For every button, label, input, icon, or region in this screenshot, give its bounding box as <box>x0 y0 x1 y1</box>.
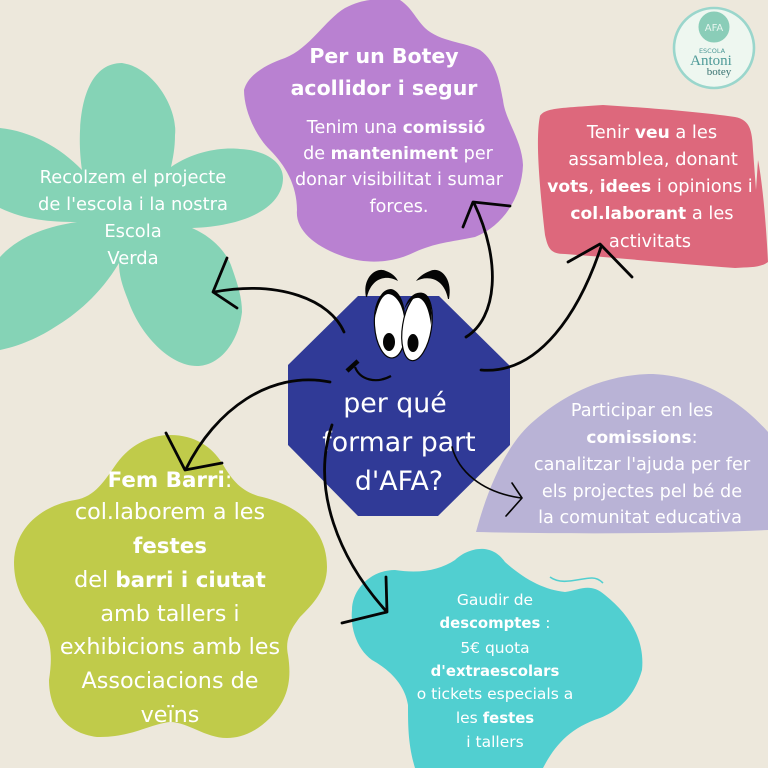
icon: cartoon face <box>347 270 450 380</box>
text: neighbourhood <box>60 467 280 728</box>
arrow: to teal blob <box>325 425 387 623</box>
panel: purple blob, welcoming school <box>244 0 523 262</box>
text: school project: de l'escola i la nostra <box>38 194 228 215</box>
text: discounts: Gaudir de <box>457 591 533 609</box>
icon: AFA school logo <box>674 8 754 88</box>
arrow: to green flower <box>213 258 344 332</box>
text: voice in assemblies: assamblea, donant <box>568 149 738 170</box>
icon: AFA school logo: AFA <box>705 23 723 34</box>
text: neighbourhood: festes <box>133 534 207 559</box>
panel: teal blob, discounts <box>352 549 642 768</box>
panel: green flower, school project <box>0 63 283 366</box>
text: discounts: i tallers <box>466 733 524 751</box>
text: discounts: o tickets especials a <box>417 685 573 703</box>
panel: lime flower, neighbourhood <box>14 435 327 738</box>
text: voice in assemblies: vots, idees i opinions i <box>547 176 753 197</box>
arrow: to purple blob <box>463 202 510 337</box>
heading: welcoming school: Per un Botey <box>309 44 459 68</box>
icon: AFA school logo: botey <box>707 66 732 78</box>
text: discounts: 5€ quota <box>460 639 530 657</box>
panel: lavender dome, commissions <box>476 374 768 533</box>
heading: central question: formar part <box>322 427 476 458</box>
panel: central octagon <box>288 296 510 516</box>
text: maintenance commission: donar visibilitat i sumar <box>295 170 504 190</box>
text: school project: Verda <box>107 248 159 269</box>
heading: welcoming school <box>291 44 478 100</box>
text: maintenance commission: Tenim una comissió <box>306 117 485 138</box>
arrow: to lime flower <box>166 380 330 470</box>
text: school project <box>38 167 228 269</box>
icon: AFA school logo: Antoni <box>690 53 732 69</box>
heading: central question: per qué <box>343 388 447 419</box>
text: neighbourhood: exhibicions amb les <box>60 634 280 660</box>
text: voice in assemblies: col.laborant a les <box>570 203 734 224</box>
heading: welcoming school: acollidor i segur <box>291 76 478 100</box>
text: commissions: Participar en les <box>571 401 713 421</box>
heading: central question: d'AFA? <box>355 466 443 497</box>
text: discounts: d'extraescolars <box>431 662 559 680</box>
text: commissions: la comunitat educativa <box>538 508 742 528</box>
text: voice in assemblies: Tenir veu a les <box>586 122 717 143</box>
text: maintenance commission: forces. <box>369 197 429 217</box>
text: neighbourhood: veïns <box>141 702 199 728</box>
panel: red brush shape, voice in assemblies <box>538 105 768 268</box>
arrow: to red shape <box>481 244 632 370</box>
heading: central question <box>322 388 476 497</box>
text: neighbourhood: del barri i ciutat <box>74 567 266 593</box>
icon: AFA school logo: ESCOLA <box>699 47 726 55</box>
text: discounts: descomptes : <box>440 614 550 632</box>
text: maintenance commission: de manteniment per <box>303 143 494 164</box>
text: discounts: les festes <box>456 709 534 727</box>
text: maintenance commission <box>295 117 504 217</box>
text: discounts <box>417 591 573 751</box>
text: school project: Escola <box>104 221 162 242</box>
arrow: to lavender dome <box>452 447 522 516</box>
text: neighbourhood: amb tallers i <box>100 601 240 627</box>
text: commissions: els projectes pel bé de <box>542 482 742 502</box>
text: neighbourhood: Associacions de <box>81 668 259 694</box>
text: commissions <box>534 401 751 528</box>
text: voice in assemblies <box>547 122 753 252</box>
text: neighbourhood: Fem Barri: <box>108 467 232 493</box>
text: voice in assemblies: activitats <box>609 231 691 252</box>
text: commissions: comissions: <box>586 428 698 448</box>
text: commissions: canalitzar l'ajuda per fer <box>534 455 751 475</box>
text: neighbourhood: col.laborem a les <box>75 499 265 525</box>
text: school project: Recolzem el projecte <box>40 167 226 188</box>
